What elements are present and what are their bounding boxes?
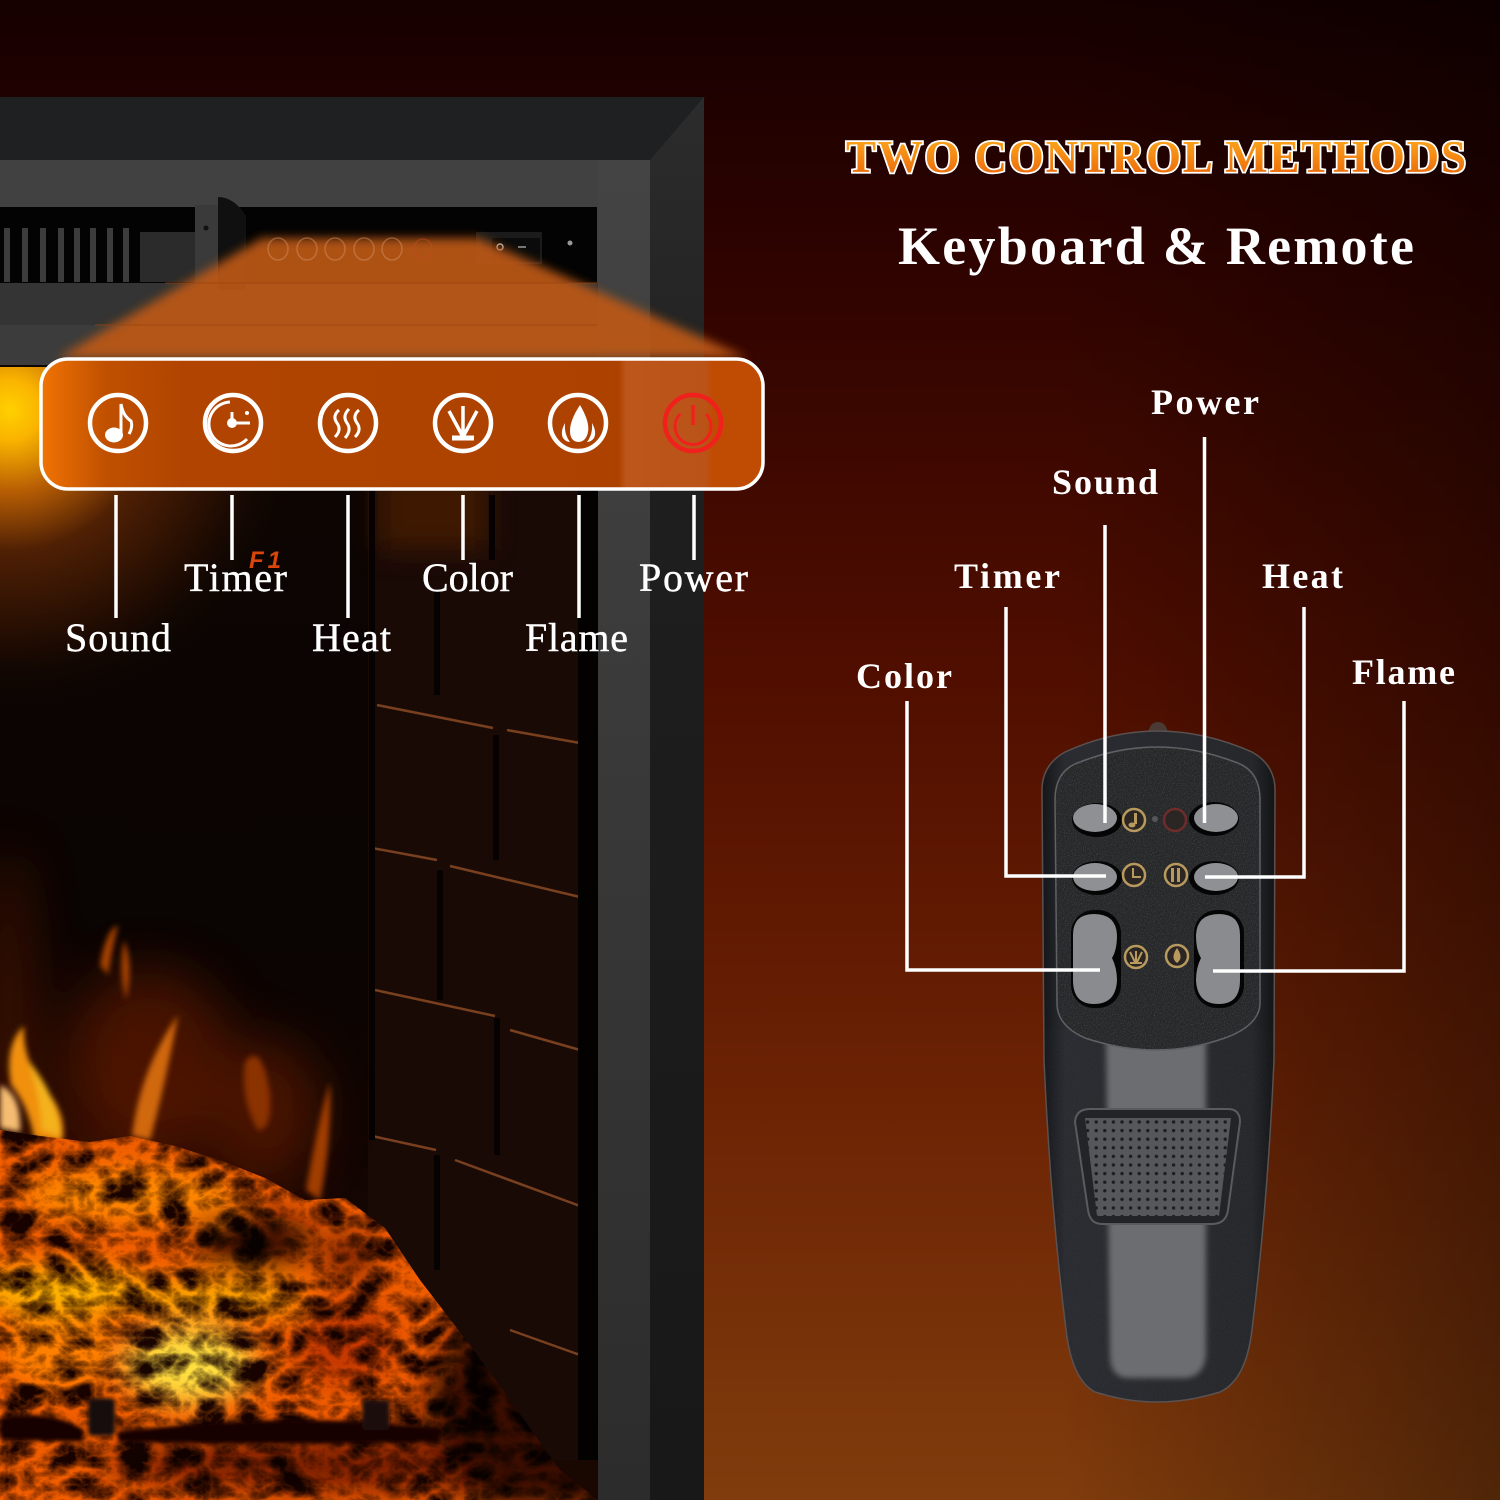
button: timer — [1073, 863, 1117, 891]
frame outer side rail — [650, 97, 704, 1500]
label: timer: Timer — [954, 556, 1060, 596]
icon: timer — [205, 395, 261, 451]
label: timer: Timer — [184, 555, 287, 600]
flames — [0, 850, 330, 1200]
keyboard labels — [65, 495, 748, 660]
remote icons — [1123, 809, 1188, 968]
dark vein texture — [0, 1125, 600, 1500]
LED display F1: F1 — [249, 547, 285, 574]
glowing logs — [0, 1130, 598, 1500]
button: sound — [1073, 804, 1117, 832]
grip texture — [1044, 1030, 1274, 1405]
fascia lines through beam — [95, 283, 597, 325]
button: power — [1194, 804, 1238, 832]
label: sound: Sound — [1052, 462, 1158, 502]
label: flame: Flame — [1352, 652, 1455, 692]
button shadows — [1071, 802, 1244, 1008]
frame top rail — [0, 97, 705, 160]
label: color: Color — [856, 656, 952, 696]
label: heat: Heat — [1262, 556, 1343, 596]
button: heat — [1194, 863, 1238, 891]
rocker switch — [476, 232, 572, 264]
icon: flame — [550, 395, 606, 451]
faceplate — [1050, 740, 1265, 1060]
warm lower glow — [0, 820, 400, 1500]
dark log gaps — [0, 1398, 440, 1444]
label: heat: Heat — [312, 615, 391, 660]
speaker grille — [1075, 1109, 1240, 1224]
title: TWO CONTROL METHODS — [846, 132, 1466, 182]
button: color — [1073, 914, 1117, 1004]
mounting bracket — [195, 197, 246, 290]
subtitle: Keyboard & Remote — [898, 216, 1414, 276]
faint strip icons — [268, 238, 432, 260]
leader lines — [907, 437, 1404, 971]
projection beam — [58, 238, 748, 358]
frame inner side rail — [598, 160, 650, 1500]
control strip fascia — [0, 160, 598, 365]
label: power: Power — [1151, 382, 1259, 422]
firebox interior — [0, 365, 598, 1500]
label: color: Color — [422, 555, 513, 600]
icon: sound — [90, 395, 146, 451]
antenna nub — [1148, 722, 1168, 733]
remote control — [1042, 722, 1275, 1405]
button: flame — [1196, 914, 1240, 1004]
fireplace photo — [0, 365, 660, 1500]
brick wall — [368, 470, 598, 1460]
remote icon glyphs — [1128, 813, 1180, 964]
icon: heat — [320, 395, 376, 451]
remote body — [1042, 731, 1275, 1402]
right edge shading — [700, 0, 1500, 1500]
remote labels — [856, 382, 1455, 971]
vent slots — [4, 228, 195, 282]
fireplace frame — [0, 97, 705, 1500]
leader lines — [116, 495, 694, 618]
label: power: Power — [639, 555, 748, 600]
control slot — [0, 207, 597, 283]
keyboard icon panel — [41, 359, 763, 489]
yellow side glow — [0, 367, 320, 717]
icon: power — [665, 395, 721, 451]
icon: color — [435, 395, 491, 451]
label: sound: Sound — [65, 615, 171, 660]
center highlight strip — [1106, 1040, 1206, 1378]
label: flame: Flame — [525, 615, 628, 660]
